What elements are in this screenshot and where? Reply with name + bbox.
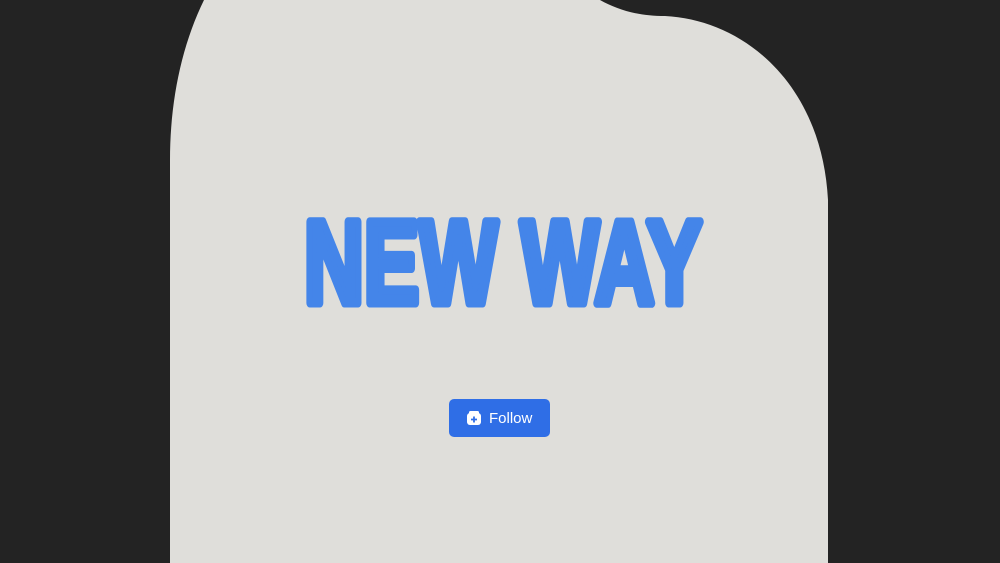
- button: Follow: Follow: [489, 410, 532, 426]
- icon: plus box: [467, 411, 481, 425]
- button: Follow: [449, 399, 550, 437]
